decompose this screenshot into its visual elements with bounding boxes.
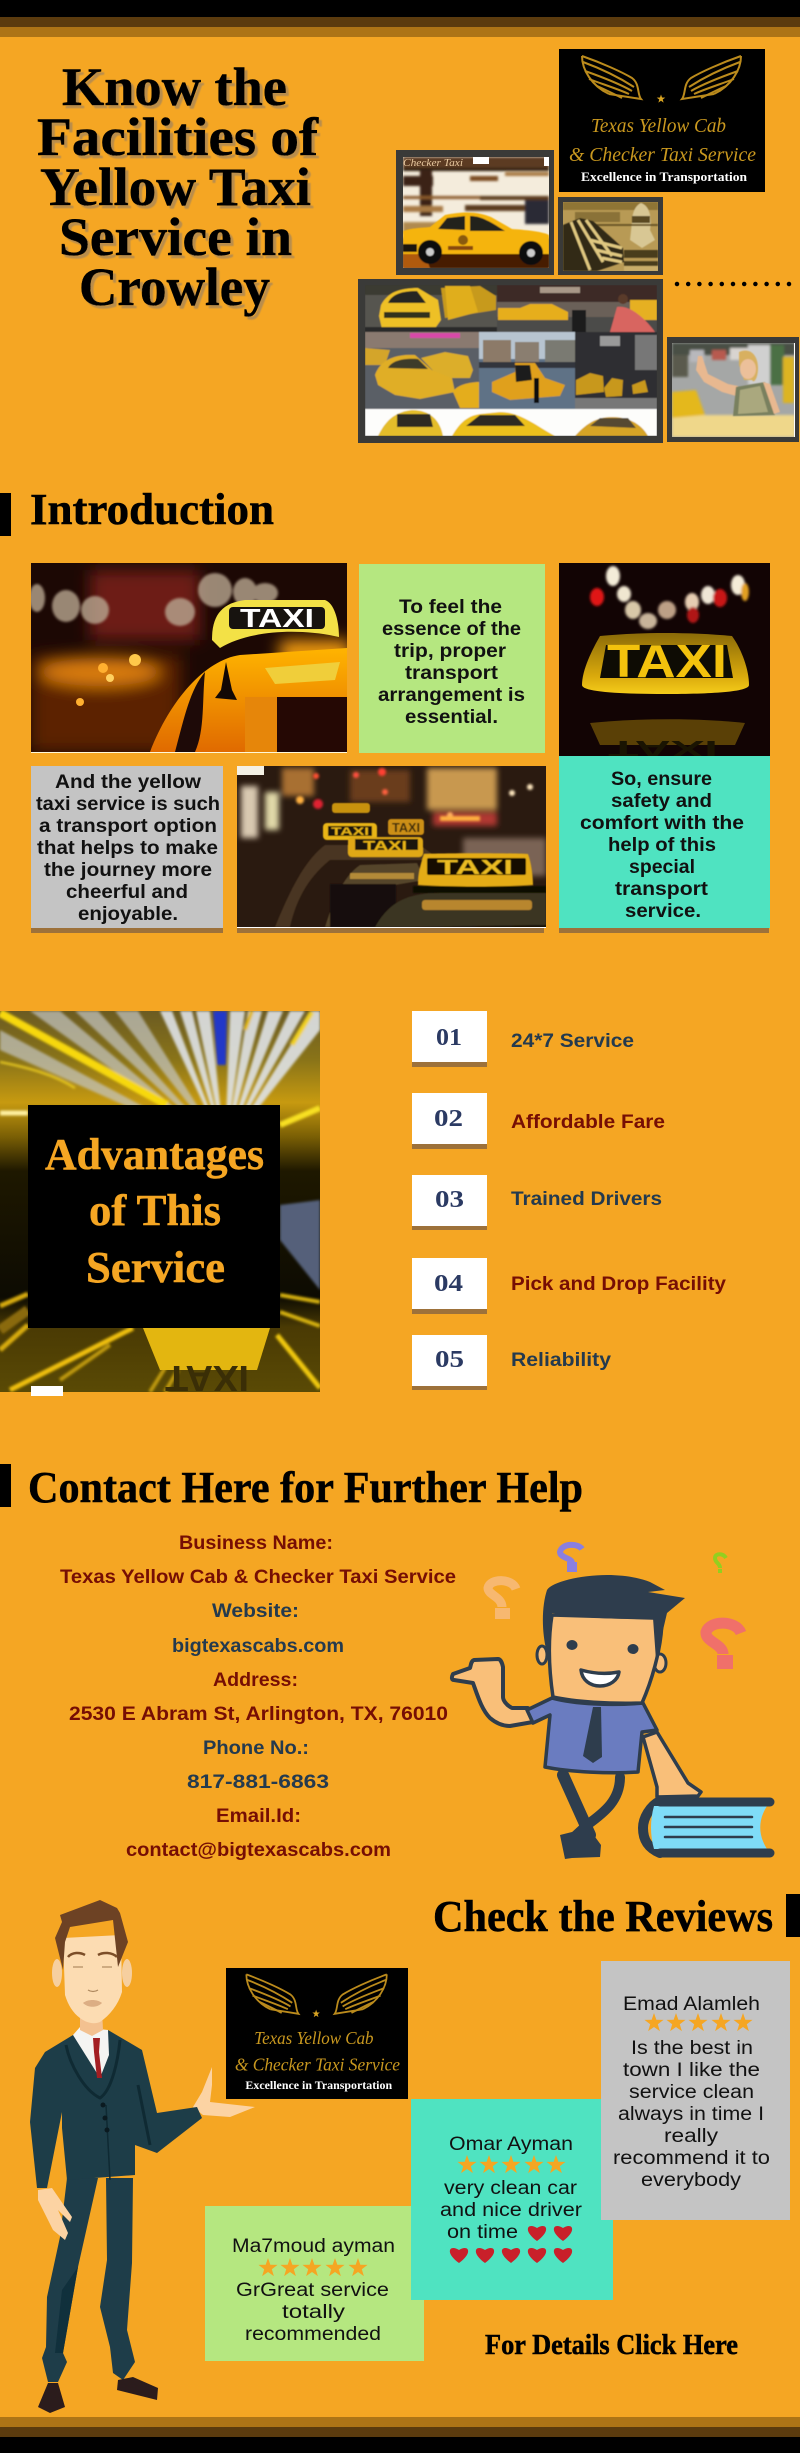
text box: essence of the trip: transport (405, 663, 499, 684)
jacket (30, 2030, 202, 2188)
text box: ensure safety and comfort: service. (625, 901, 701, 922)
title (37, 57, 319, 317)
list item 03: Trained Drivers (511, 1189, 662, 1210)
panel title: Advantages (45, 1130, 264, 1179)
text box: yellow taxi service: a transport option (39, 816, 217, 837)
hair (55, 1900, 128, 1970)
photo: taxi queue at night: TAXI (363, 838, 407, 853)
neck and face (80, 2010, 103, 2036)
tie (93, 2038, 102, 2078)
logo text: Texas Yellow Cab (254, 2028, 374, 2048)
light streaks (0, 1011, 320, 1392)
photo: glowing taxi sign: TAXI (608, 736, 718, 761)
rating stars (258, 2258, 368, 2276)
review card: Ma7moud ayman: Ma7moud ayman (232, 2236, 395, 2257)
text box: ensure safety and comfort: special (629, 857, 695, 878)
shirt collar (73, 2027, 109, 2078)
list item 05 (412, 1335, 611, 1390)
row 2 (365, 332, 479, 409)
title: Facilities of (37, 107, 319, 167)
text box: yellow taxi service (31, 766, 223, 933)
contact details: 817-881-6863 (187, 1772, 329, 1793)
ears (537, 1646, 547, 1664)
panel title: of This (89, 1186, 221, 1235)
dotted line (677, 282, 800, 286)
icon: right wing (335, 1974, 387, 2014)
title: Crowley (79, 257, 270, 317)
photo: glowing taxi sign: TAXI (607, 635, 727, 687)
logo: Texas Yellow Cab (559, 49, 765, 192)
text box: ensure safety and comfort: So, ensure (611, 769, 712, 790)
buttons (100, 2102, 110, 2132)
top stripes (0, 0, 800, 37)
icon: left wing (582, 56, 641, 99)
bokeh lights (29, 573, 278, 626)
review card: Emad Alamleh: Emad Alamleh (623, 1994, 760, 2015)
contact details: Phone No.: (203, 1738, 309, 1759)
sign dome (582, 633, 749, 694)
list item 04: Pick and Drop Facility (511, 1274, 726, 1295)
car roofs (275, 845, 440, 927)
photo: taxi queue at night: TAXI (392, 820, 420, 835)
panel: advantages photo and title (0, 1011, 320, 1399)
review card: Ma7moud ayman: recommended (245, 2324, 381, 2345)
logo text: Excellence in Transportation (581, 169, 748, 184)
review card: Ma7moud ayman: GrGreat service (236, 2280, 389, 2301)
text box: ensure safety and comfort: safety and (611, 791, 712, 812)
photo caption: Checker Taxi (403, 157, 463, 169)
smile (581, 1670, 619, 1686)
eyes (566, 1640, 578, 1650)
photo: taxi roof sign orange (29, 563, 350, 753)
list item 01 (412, 1011, 634, 1067)
rating stars (644, 2013, 753, 2031)
logo text: Excellence in Transportation (245, 2079, 393, 2092)
icon: question marks (488, 1545, 741, 1669)
text box: yellow taxi service: taxi service is such (36, 794, 220, 815)
review card: Omar Ayman: on time (447, 2222, 518, 2243)
list item 02: 02 (434, 1106, 463, 1132)
icon: star (312, 2010, 320, 2017)
review card: Emad Alamleh: Is the best in (631, 2038, 753, 2059)
photo: taxi queue at night (237, 766, 546, 933)
contact details: Texas Yellow Cab & Checker Taxi Service (60, 1567, 456, 1588)
list item 03 (412, 1175, 662, 1230)
heading: Contact Here for Further Help: Contact Here for Further Help (28, 1463, 583, 1512)
text box: essence of the trip: To feel the (399, 597, 502, 618)
legs (563, 1775, 590, 1835)
roof sign (212, 600, 339, 648)
photo: taxi roof sign orange: TAXI (240, 603, 314, 633)
list item 05: Reliability (511, 1350, 611, 1371)
contact details: 2530 E Abram St, Arlington, TX, 76010 (69, 1704, 448, 1725)
text box: ensure safety and comfort: help of this (608, 835, 716, 856)
ears (52, 1959, 62, 1987)
photo: taxi queue at night: TAXI (331, 826, 369, 838)
logo repeated beside man (226, 1968, 408, 2099)
review card: Ma7moud ayman: totally (282, 2302, 346, 2323)
review card: Omar Ayman: very clean car (444, 2178, 578, 2199)
reflected taxi sign (143, 1328, 270, 1370)
shirt (527, 1698, 657, 1773)
contact details (60, 1533, 456, 1861)
text box: ensure safety and comfort: transport (615, 879, 709, 900)
list item 04: 04 (434, 1271, 463, 1297)
review card: Emad Alamleh: town I like the (623, 2060, 760, 2081)
contact details: Address: (213, 1670, 298, 1691)
panel title (45, 1130, 264, 1292)
logo text: & Checker Taxi Service (235, 2054, 400, 2075)
book (643, 1801, 660, 1853)
text box: essence of the trip: essence of the (382, 619, 521, 640)
shoes (38, 2383, 65, 2413)
review card: Omar Ayman: and nice driver (440, 2200, 583, 2221)
logo text: & Checker Taxi Service (569, 144, 756, 166)
text box: yellow taxi service: that helps to make (37, 838, 218, 859)
review card: Omar Ayman (411, 2099, 613, 2300)
list item 02: Affordable Fare (511, 1112, 665, 1133)
taxi signs (332, 803, 370, 813)
right arm (643, 1732, 701, 1797)
title: Know the (62, 57, 287, 117)
review card: Emad Alamleh: service clean (629, 2082, 754, 2103)
illustration: man in suit (30, 1900, 255, 2413)
logo text (235, 2028, 400, 2092)
list item 05: 05 (435, 1347, 464, 1373)
row 3 (365, 409, 657, 436)
text box: ensure safety and comfort: comfort with the (580, 813, 744, 834)
logo text (569, 115, 756, 184)
contact details: Business Name: (179, 1533, 333, 1554)
list item 02 (412, 1093, 665, 1149)
text box: essence of the trip (359, 564, 545, 753)
review card: Emad Alamleh: really (664, 2126, 719, 2147)
heading: Introduction: Introduction (30, 485, 274, 534)
icon: star (657, 94, 665, 103)
text box: essence of the trip: arrangement is (378, 685, 525, 706)
heading: Check the Reviews: Check the Reviews (433, 1892, 773, 1941)
panel title: Service (86, 1243, 225, 1292)
text box: essence of the trip: trip, proper (394, 641, 507, 662)
hearts (450, 2226, 572, 2263)
row 1 (365, 285, 497, 332)
review card: Ma7moud ayman (205, 2206, 424, 2361)
photo: taxi queue at night: TAXI (437, 857, 513, 879)
face (549, 1615, 662, 1703)
facial features (68, 1953, 117, 1992)
bokeh lights (590, 566, 749, 629)
photo: taxi collage (358, 279, 663, 443)
text box: yellow taxi service: And the yellow (55, 772, 201, 793)
review card: Emad Alamleh: recommend it to (613, 2148, 770, 2169)
illustration: cartoon man with book (452, 1575, 770, 1859)
rating stars (457, 2155, 566, 2173)
list item 01: 01 (436, 1025, 462, 1051)
front taxi sign (418, 853, 533, 886)
list item 03: 03 (435, 1187, 464, 1213)
contact details: bigtexascabs.com (172, 1636, 344, 1657)
photo: airport seats (558, 197, 663, 275)
bottom stripes (0, 2417, 800, 2453)
text box: ensure safety and comfort (559, 756, 770, 933)
tie (583, 1707, 602, 1763)
review card: Emad Alamleh: everybody (641, 2170, 742, 2191)
review card: Omar Ayman: Omar Ayman (449, 2134, 573, 2155)
photo: checker taxi (396, 150, 554, 275)
list item 01: 24*7 Service (511, 1031, 634, 1052)
text box: yellow taxi service: cheerful and (66, 882, 188, 903)
review card: Emad Alamleh: always in time I (618, 2104, 764, 2125)
legs (42, 2178, 98, 2382)
logo text: Texas Yellow Cab (591, 115, 726, 137)
list item 04 (412, 1258, 726, 1314)
taxi body (150, 648, 347, 752)
icon: left wing (246, 1974, 298, 2014)
right hand (193, 2067, 255, 2117)
text box: yellow taxi service: the journey more (44, 860, 212, 881)
title: Service in (59, 207, 292, 267)
photo: glowing taxi sign (559, 563, 770, 761)
contact details: Email.Id: (216, 1806, 301, 1827)
text box: essence of the trip: essential. (405, 707, 498, 728)
text box: yellow taxi service: enjoyable. (78, 904, 178, 925)
left arm (452, 1659, 533, 1726)
contact details: Website: (212, 1601, 299, 1622)
left hand (38, 2188, 72, 2240)
call to action: For Details Click Here: For Details Click Here (485, 2330, 738, 2361)
contact details: contact@bigtexascabs.com (126, 1840, 391, 1861)
title: Yellow Taxi (40, 157, 311, 217)
review card: Emad Alamleh (601, 1961, 790, 2220)
hair (543, 1575, 685, 1660)
photo: woman hailing taxi (667, 337, 799, 442)
panel: advantages photo and title: TAXI (165, 1358, 249, 1399)
icon: right wing (682, 56, 741, 99)
